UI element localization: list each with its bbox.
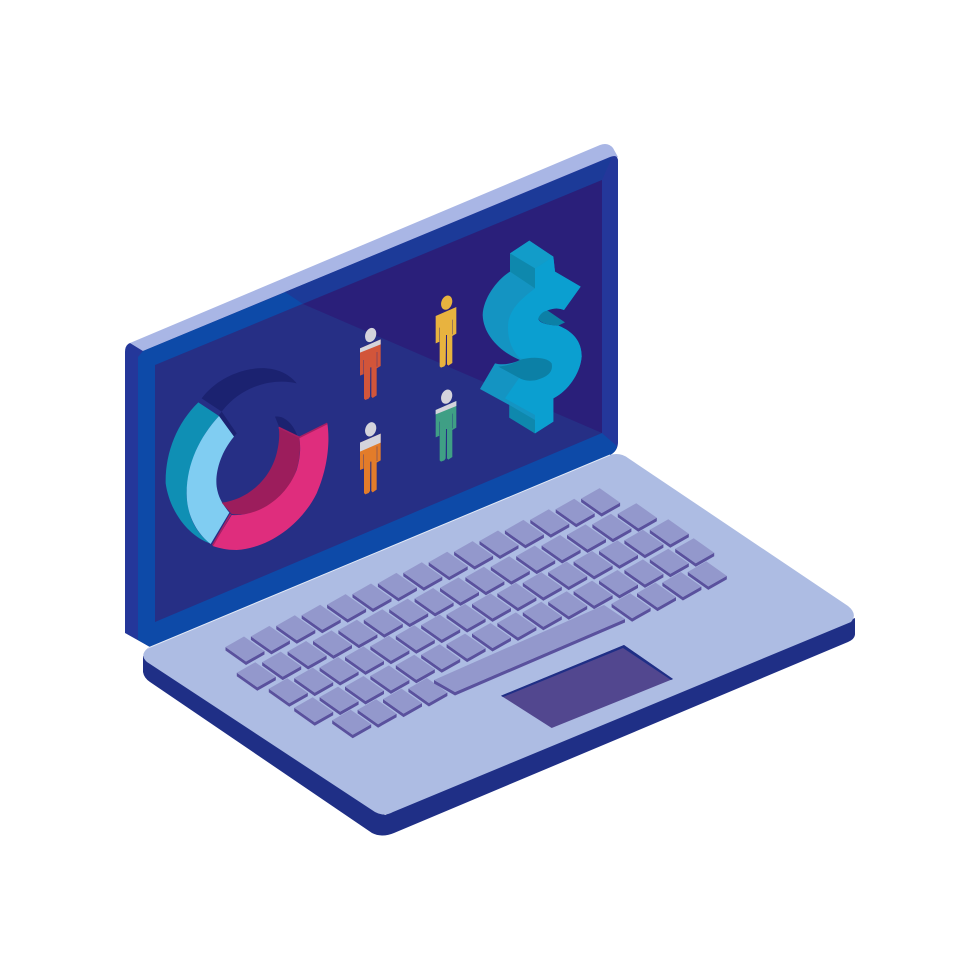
dollar sign — [480, 241, 582, 433]
lid outer frame — [125, 156, 618, 647]
deck — [143, 454, 855, 836]
keyboard — [226, 488, 727, 738]
person: orange — [360, 421, 381, 494]
people icons — [360, 294, 456, 494]
screen — [155, 180, 602, 622]
lid — [125, 144, 618, 647]
donut chart — [166, 368, 328, 550]
person: yellow — [436, 294, 456, 368]
bezel inner — [138, 157, 617, 647]
person: green — [436, 388, 456, 462]
touchpad — [501, 645, 673, 728]
hinge highlight — [148, 455, 610, 648]
person: red — [360, 326, 381, 400]
deck top — [143, 454, 854, 814]
deck side — [143, 618, 855, 836]
lid top edge — [130, 144, 618, 351]
screen shaded area — [303, 180, 602, 433]
